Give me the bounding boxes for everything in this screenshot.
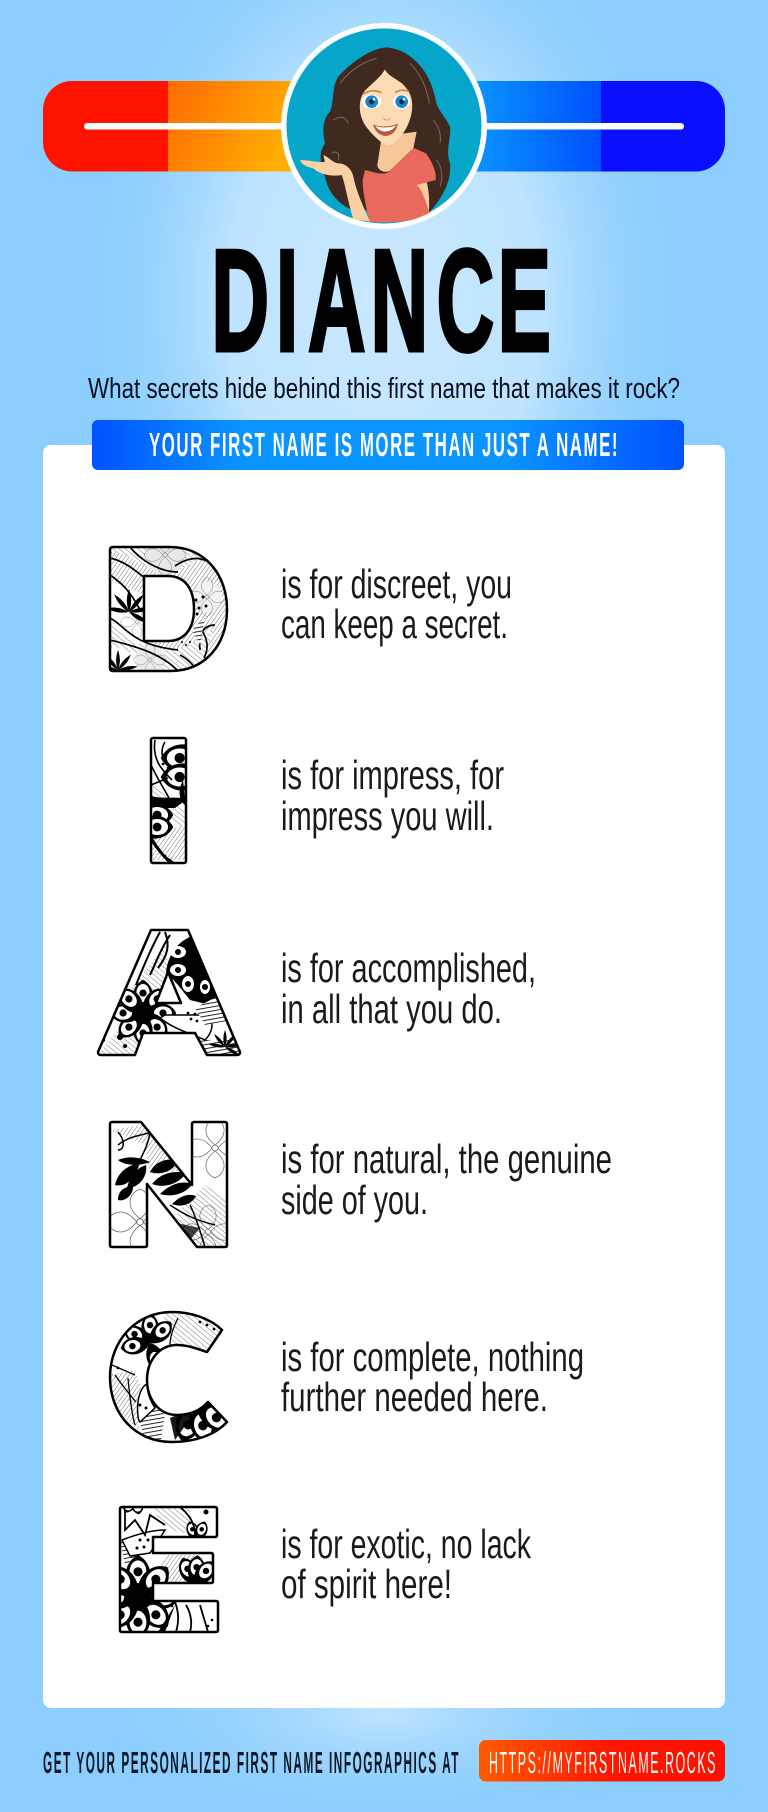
- nose and mouth: [383, 118, 391, 120]
- text: is for exotic, no lack: [281, 1521, 531, 1567]
- icon: decorated letter E: [118, 1506, 220, 1634]
- row: letter N: [107, 1118, 612, 1259]
- text: in all that you do.: [281, 986, 502, 1032]
- icon: decorated letter N: [108, 1120, 228, 1248]
- white content panel: [43, 445, 725, 1708]
- icon: decorated letter D: [108, 546, 228, 672]
- banner: [92, 420, 684, 470]
- text: is for discreet, you: [281, 561, 512, 607]
- row: letter A: [97, 929, 536, 1057]
- eyes: [362, 95, 381, 109]
- neck and chest: [377, 132, 417, 172]
- text: further needed here.: [281, 1374, 548, 1420]
- text: is for natural, the genuine: [281, 1136, 612, 1182]
- icon: decorated letter I: [150, 736, 188, 864]
- text: of spirit here!: [281, 1561, 452, 1607]
- row: letter E: [118, 1506, 531, 1634]
- text: [281, 752, 504, 839]
- text: can keep a secret.: [281, 601, 508, 647]
- title: name: DIANCE: [211, 219, 551, 381]
- icon: decorated letter A: [97, 929, 242, 1057]
- pink top: [363, 148, 436, 222]
- brows: [363, 90, 409, 94]
- text: [281, 945, 536, 1032]
- face: [360, 69, 412, 145]
- text: is for impress, for: [281, 752, 504, 798]
- text: is for accomplished,: [281, 945, 536, 991]
- right arm: [414, 182, 430, 220]
- text: [281, 1136, 612, 1223]
- raised arm and hand: [300, 155, 370, 221]
- character portrait: [281, 23, 487, 229]
- hair: [321, 47, 450, 212]
- header colour bar: [43, 81, 725, 172]
- text: [281, 561, 512, 647]
- row: letter C: [108, 1310, 584, 1445]
- text: side of you.: [281, 1177, 428, 1223]
- text: is for complete, nothing: [281, 1334, 584, 1380]
- row: letter I: [133, 737, 504, 864]
- text: [281, 1521, 531, 1607]
- text: [281, 1334, 584, 1420]
- row: letter D: [108, 546, 510, 672]
- icon: decorated letter C: [108, 1310, 238, 1445]
- text: impress you will.: [281, 793, 494, 839]
